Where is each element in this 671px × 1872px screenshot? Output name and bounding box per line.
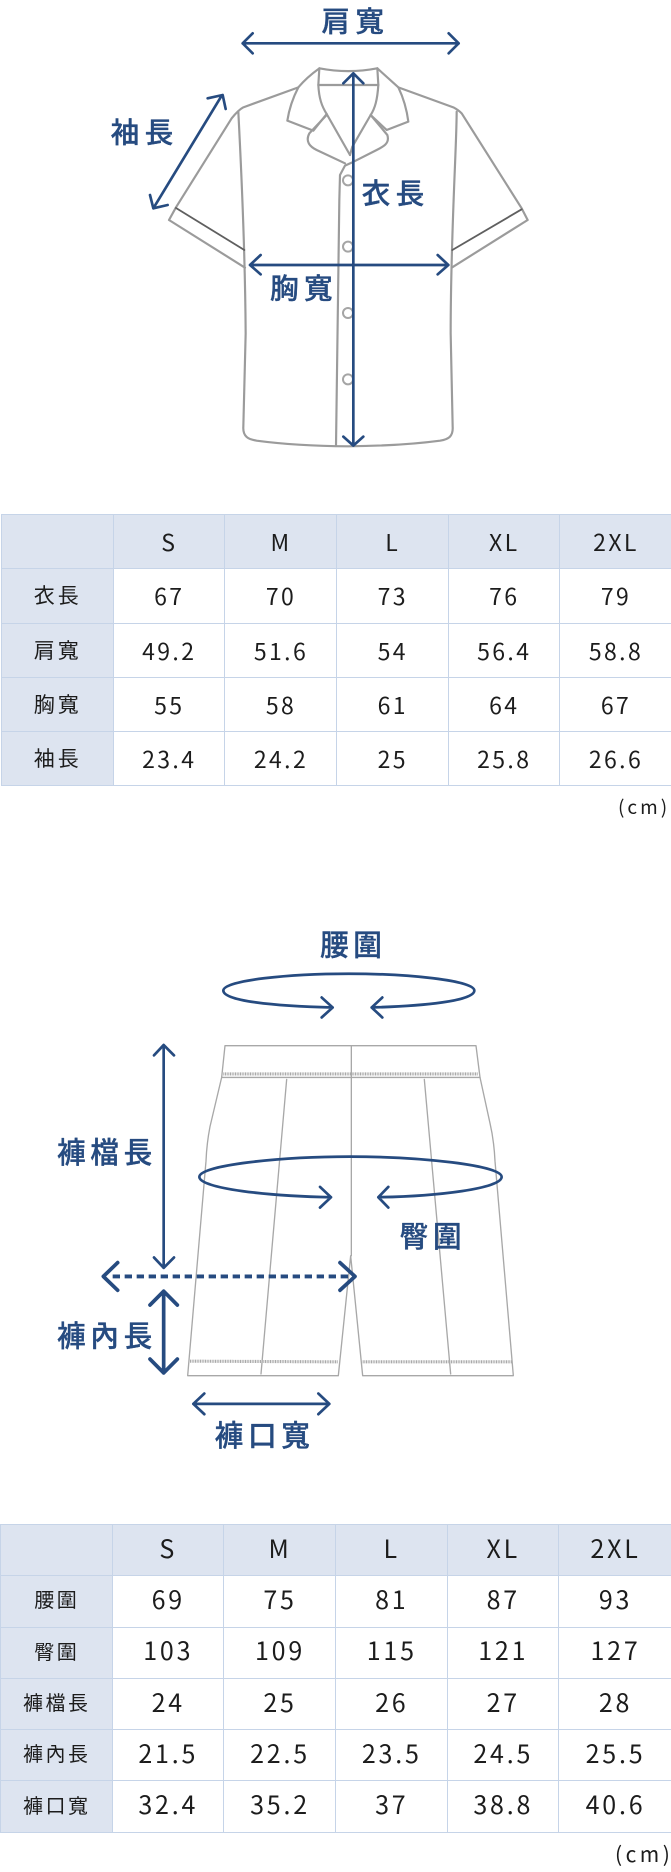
row: waist: 腰圍 bbox=[34, 1584, 79, 1613]
header row: 2XL bbox=[590, 1530, 641, 1566]
row: shoulder width: 58.8 bbox=[589, 633, 643, 667]
row: waist: 87 bbox=[487, 1581, 520, 1617]
header row: S bbox=[159, 1530, 177, 1566]
row: waist: 81 bbox=[375, 1581, 408, 1617]
label: inseam: 褲內長 bbox=[57, 1313, 157, 1356]
row: chest width: 61 bbox=[378, 687, 408, 721]
buttons bbox=[343, 175, 353, 384]
row: rise: 25 bbox=[263, 1684, 297, 1720]
row: inseam: 23.5 bbox=[362, 1735, 422, 1771]
row: sleeve length: 24.2 bbox=[254, 741, 308, 775]
row: rise: 26 bbox=[375, 1684, 408, 1720]
header row: XL bbox=[489, 524, 519, 558]
shorts diagram bbox=[57, 922, 514, 1455]
row: leg opening: 褲口寬 bbox=[23, 1790, 90, 1819]
row: shoulder width bbox=[2, 624, 643, 677]
row: body length bbox=[2, 569, 631, 623]
dashed crotch line bbox=[103, 1263, 355, 1290]
shorts outline bbox=[188, 1046, 513, 1376]
row: hip bbox=[1, 1628, 641, 1678]
arrow: shoulder width bbox=[243, 33, 459, 53]
row: sleeve length: 26.6 bbox=[589, 741, 643, 775]
header row: M bbox=[270, 524, 292, 558]
row: hip: 臀圍 bbox=[34, 1636, 79, 1665]
header row: S bbox=[161, 524, 177, 558]
row: rise: 28 bbox=[599, 1684, 632, 1720]
row: leg opening: 37 bbox=[375, 1786, 408, 1822]
row: sleeve length: 23.4 bbox=[142, 741, 196, 775]
arrow: leg opening bbox=[193, 1394, 329, 1414]
row: waist bbox=[1, 1576, 632, 1627]
row: body length: 70 bbox=[266, 578, 296, 612]
header row: 2XL bbox=[593, 524, 639, 558]
row: sleeve length: 25.8 bbox=[477, 741, 531, 775]
label: shoulder width: 肩寬 bbox=[321, 0, 389, 40]
table: shorts sizes bbox=[0, 1524, 671, 1833]
label: hip: 臀圍 bbox=[400, 1214, 466, 1256]
row: waist: 93 bbox=[599, 1581, 632, 1617]
arrow: body length bbox=[343, 73, 363, 446]
row: shoulder width: 肩寬 bbox=[34, 635, 82, 665]
row: rise: 24 bbox=[152, 1684, 185, 1720]
row: shoulder width: 49.2 bbox=[142, 633, 196, 667]
label: body length: 衣長 bbox=[362, 171, 430, 212]
row: shoulder width: 51.6 bbox=[254, 633, 308, 667]
row: inseam bbox=[1, 1730, 645, 1780]
row: sleeve length: 25 bbox=[378, 741, 408, 775]
stitching bbox=[190, 1074, 513, 1362]
row: body length: 67 bbox=[154, 578, 184, 612]
row: leg opening: 32.4 bbox=[138, 1786, 198, 1822]
row: shoulder width: 56.4 bbox=[477, 633, 531, 667]
cuff seams bbox=[176, 208, 522, 250]
row: body length: 衣長 bbox=[34, 580, 82, 610]
row: sleeve length bbox=[2, 732, 643, 785]
arrow: waist loop bbox=[223, 974, 474, 1017]
row: inseam: 褲內長 bbox=[23, 1738, 90, 1767]
row: leg opening: 40.6 bbox=[586, 1786, 645, 1822]
row: chest width: 67 bbox=[601, 687, 631, 721]
row: chest width: 58 bbox=[266, 687, 296, 721]
row: body length: 76 bbox=[489, 578, 519, 612]
table: top sizes bbox=[1, 514, 671, 786]
label: waist: 腰圍 bbox=[320, 922, 387, 965]
arrow: inseam bbox=[150, 1291, 177, 1373]
row: hip: 109 bbox=[255, 1632, 305, 1668]
label: sleeve length: 袖長 bbox=[111, 111, 179, 152]
arrow: chest width bbox=[250, 255, 448, 274]
row: hip: 103 bbox=[143, 1632, 193, 1668]
row: leg opening bbox=[1, 1781, 645, 1832]
row: rise bbox=[1, 1679, 632, 1729]
arrow: rise bbox=[154, 1045, 174, 1268]
label: chest width: 胸寬 bbox=[270, 267, 338, 308]
row: inseam: 24.5 bbox=[473, 1735, 533, 1771]
arrow: hip loop bbox=[199, 1157, 502, 1208]
row: sleeve length: 袖長 bbox=[34, 743, 82, 773]
row: inseam: 21.5 bbox=[138, 1735, 198, 1771]
row: chest width: 64 bbox=[489, 687, 519, 721]
row: shoulder width: 54 bbox=[378, 633, 408, 667]
row: rise: 褲檔長 bbox=[23, 1687, 90, 1716]
row: body length: 73 bbox=[378, 578, 408, 612]
row: inseam: 22.5 bbox=[250, 1735, 310, 1771]
row: leg opening: 35.2 bbox=[250, 1786, 310, 1822]
row: body length: 79 bbox=[601, 578, 631, 612]
header row bbox=[1, 1525, 671, 1832]
row: rise: 27 bbox=[487, 1684, 520, 1720]
row: chest width: 55 bbox=[154, 687, 184, 721]
label: rise: 褲檔長 bbox=[57, 1129, 157, 1172]
row: hip: 127 bbox=[590, 1632, 641, 1668]
unit note: top table: (cm) bbox=[618, 793, 670, 820]
shirt diagram bbox=[111, 0, 529, 448]
arrow: sleeve length bbox=[150, 95, 226, 208]
header row: L bbox=[385, 524, 400, 558]
label: leg opening: 褲口寬 bbox=[215, 1413, 315, 1455]
row: chest width: 胸寬 bbox=[34, 689, 82, 719]
header row: L bbox=[384, 1530, 400, 1566]
shirt outline bbox=[169, 68, 528, 446]
header row: M bbox=[268, 1530, 292, 1566]
row: inseam: 25.5 bbox=[586, 1735, 645, 1771]
row: leg opening: 38.8 bbox=[473, 1786, 533, 1822]
header row bbox=[2, 515, 671, 785]
header row: XL bbox=[486, 1530, 520, 1566]
row: hip: 121 bbox=[478, 1632, 528, 1668]
row: waist: 69 bbox=[152, 1581, 185, 1617]
row: waist: 75 bbox=[263, 1581, 297, 1617]
row: chest width bbox=[2, 678, 631, 731]
row: hip: 115 bbox=[367, 1632, 417, 1668]
